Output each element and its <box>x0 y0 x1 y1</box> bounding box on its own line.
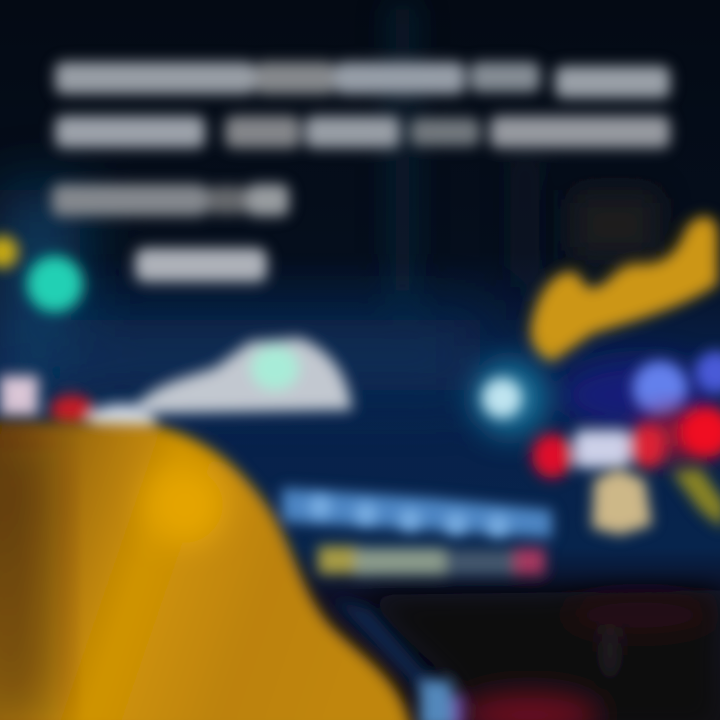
olive diagonal icon <box>672 468 720 528</box>
heading: illegible blurred text, two lines <box>55 62 670 148</box>
red and white band at left <box>0 376 156 440</box>
blue glowing dot <box>472 360 548 436</box>
dark lower panel <box>360 590 720 720</box>
label: illegible blurred text <box>135 248 267 282</box>
blue strip <box>282 488 552 538</box>
subheading: illegible blurred text <box>52 184 289 216</box>
multicoloured strip <box>318 546 545 576</box>
red bottom glow <box>460 693 600 720</box>
blue circles at right <box>633 351 720 415</box>
red and white band at right <box>532 407 720 478</box>
large gold shape <box>0 420 412 720</box>
icon: yellow dot at left edge <box>0 236 18 268</box>
blue bottom accent <box>420 680 464 720</box>
blue edge beside gold shape <box>335 600 440 690</box>
white dome graphic <box>135 338 352 414</box>
gold swoosh at right <box>530 216 718 362</box>
background glows <box>0 0 720 430</box>
icon: teal dot <box>27 256 83 312</box>
cream triangle icon <box>592 468 652 535</box>
